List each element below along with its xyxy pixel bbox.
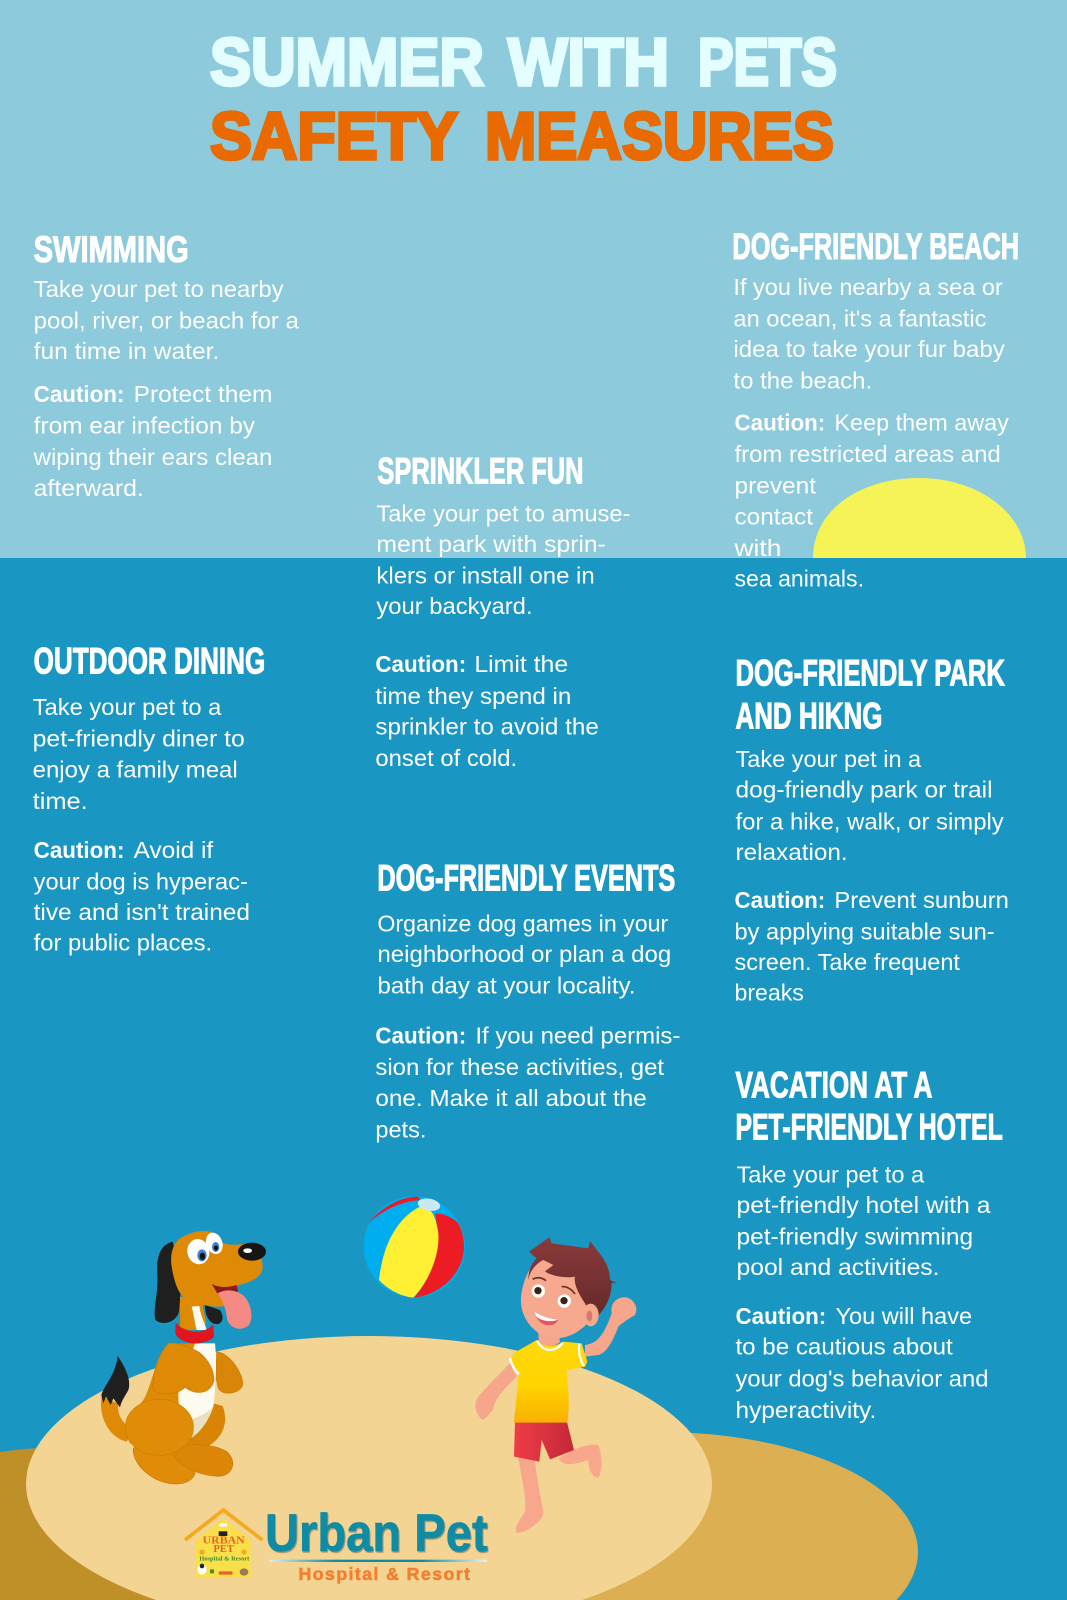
text: hotel caution: your dog's behavior and (735, 1365, 988, 1391)
heading: dog-friendly events: DOG-FRIENDLY EVENTS (377, 857, 675, 899)
text: park caution: by applying suitable sun- (734, 919, 995, 945)
text: swimming caution: wiping their ears clean (33, 444, 272, 470)
text: park description: for a hike, walk, or simply (735, 808, 1004, 834)
logo wordmark: Urban Pet (265, 1504, 488, 1563)
title line 1: PETS (698, 25, 837, 100)
text: swimming description: pool, river, or beach for a (34, 307, 299, 333)
text: beach caution: with (733, 535, 781, 561)
title (210, 25, 837, 174)
panel: pet-friendly hotel (735, 1064, 1003, 1423)
text: dining caution (34, 837, 250, 956)
text: hotel caution: You will have (835, 1303, 972, 1329)
heading: sprinkler fun: SPRINKLER FUN (377, 450, 583, 492)
text: beach description: idea to take your fur baby (733, 336, 1005, 362)
text: events description: Organize dog games in your (377, 910, 669, 936)
text: sprinkler caution: time they spend in (375, 683, 571, 709)
text: beach caution: Caution: (734, 409, 825, 435)
illustration: boy (475, 1237, 636, 1533)
title line 2 (210, 99, 834, 174)
logo tagline: Hospital & Resort (298, 1564, 470, 1584)
text: sprinkler description: your backyard. (376, 593, 532, 619)
background: sea (0, 558, 1067, 1600)
text: hotel caution: hyperactivity. (735, 1397, 876, 1423)
text: park description (735, 746, 1004, 865)
heading: swimming: SWIMMING (34, 228, 189, 270)
text: park caution: Caution: (734, 887, 825, 913)
panel: swimming (33, 228, 299, 501)
text: swimming caution: afterward. (34, 475, 144, 501)
text: park description: relaxation. (735, 839, 848, 865)
title line 1: SUMMER (210, 25, 484, 100)
text: dining caution: for public places. (34, 930, 212, 956)
panel: dog-friendly park and hiking (734, 652, 1009, 1006)
golden sand dune right (402, 1432, 918, 1600)
text: swimming caution: from ear infection by (34, 413, 256, 439)
sun (813, 478, 1026, 558)
text: events description: neighborhood or plan a dog (377, 941, 671, 967)
text: sprinkler description: Take your pet to amuse- (376, 500, 630, 526)
panel: dog-friendly events (375, 857, 680, 1142)
text: dining caution: tive and isn't trained (34, 899, 250, 925)
text: beach caution: sea animals. (734, 566, 864, 592)
text: hotel description: pool and activities. (737, 1254, 940, 1280)
text: beach description: to the beach. (733, 368, 872, 394)
text: sprinkler caution: Limit the (474, 651, 568, 677)
text: events caution: sion for these activities, get (375, 1054, 665, 1080)
title line 1: WITH (508, 25, 669, 100)
text: beach description: an ocean, it's a fantastic (733, 305, 986, 331)
text: hotel description (737, 1161, 991, 1280)
text: dining caution: Caution: (34, 837, 124, 863)
text: events description (377, 910, 671, 999)
text: park caution (734, 887, 1009, 1006)
logo icon: house: Hospital & Resort (199, 1556, 250, 1563)
text: beach description: If you live nearby a sea or (733, 274, 1003, 300)
logo icon: house (185, 1510, 262, 1577)
text: sprinkler description: ment park with sprin- (376, 531, 606, 557)
text: park description: Take your pet in a (735, 746, 921, 772)
logo icon: house: URBAN (203, 1535, 245, 1546)
text: events caution (375, 1023, 680, 1142)
panel: outdoor dining (33, 639, 265, 956)
text: swimming description (34, 276, 299, 364)
text: events caution: If you need permis- (475, 1023, 680, 1049)
text: beach caution: prevent (734, 473, 817, 499)
text: dining description: enjoy a family meal (33, 756, 238, 782)
light sand mound (26, 1336, 712, 1600)
text: hotel caution (735, 1303, 988, 1423)
text: sprinkler description (376, 500, 630, 619)
text: dining description (33, 694, 245, 814)
text: hotel description: Take your pet to a (737, 1161, 924, 1187)
logo: urban pet (185, 1504, 488, 1584)
text sections (33, 225, 1019, 1423)
text: events caution: pets. (375, 1116, 426, 1142)
text: swimming description: Take your pet to nearby (34, 276, 284, 302)
text: beach caution: from restricted areas and (734, 441, 1001, 467)
text: dining description: pet-friendly diner to (33, 726, 245, 752)
text: beach caution: Keep them away (834, 409, 1009, 435)
text: park caution: Prevent sunburn (834, 887, 1009, 913)
text: events caution: Caution: (375, 1023, 466, 1049)
text: park caution: screen. Take frequent (734, 949, 961, 975)
heading: outdoor dining: OUTDOOR DINING (34, 639, 265, 681)
text: swimming caution (33, 381, 272, 501)
text: dining description: Take your pet to a (33, 694, 222, 720)
text: events description: bath day at your locality. (377, 973, 636, 999)
text: sprinkler caution: sprinkler to avoid the (375, 713, 599, 739)
text: swimming description: fun time in water. (34, 338, 219, 364)
heading: dog-friendly park and hikng (735, 652, 1005, 736)
text: beach description (733, 274, 1005, 394)
heading: dog-friendly park and hikng: AND HIKNG (735, 694, 882, 736)
heading: vacation at a pet-friendly hotel (735, 1064, 1003, 1147)
text: beach caution: contact (734, 503, 814, 529)
text: park description: dog-friendly park or trail (735, 777, 993, 803)
background: sky (0, 0, 1067, 558)
text: hotel description: pet-friendly swimming (737, 1224, 973, 1250)
title line 1 (210, 25, 837, 100)
panel: sprinkler fun (375, 450, 630, 771)
text: park caution: breaks (734, 980, 804, 1006)
text: hotel caution: Caution: (735, 1303, 826, 1329)
logo divider (269, 1560, 487, 1562)
text: sprinkler caution: Caution: (375, 651, 466, 677)
panel: dog-friendly beach (732, 225, 1019, 592)
logo icon: house: PET (213, 1544, 234, 1555)
text: swimming caution: Protect them (134, 381, 272, 407)
text: hotel description: pet-friendly hotel with a (737, 1192, 991, 1218)
heading: vacation at a pet-friendly hotel: VACATION AT A (735, 1064, 932, 1106)
text: swimming caution: Caution: (34, 381, 124, 407)
illustration: beach ball (364, 1196, 465, 1298)
text: beach caution (733, 409, 1009, 592)
title line 2: SAFETY (210, 99, 458, 174)
illustration: dog (101, 1230, 266, 1484)
text: hotel caution: to be cautious about (735, 1334, 953, 1360)
text: dining caution: Avoid if (134, 837, 214, 863)
text: events caution: one. Make it all about the (375, 1085, 647, 1111)
dark sand left (0, 1446, 220, 1600)
text: sprinkler caution (375, 651, 599, 771)
text: sprinkler description: klers or install one in (376, 562, 595, 588)
text: dining caution: your dog is hyperac- (34, 869, 248, 895)
text: dining description: time. (33, 788, 88, 814)
text: sprinkler caution: onset of cold. (375, 745, 517, 771)
title line 2: MEASURES (485, 99, 834, 174)
